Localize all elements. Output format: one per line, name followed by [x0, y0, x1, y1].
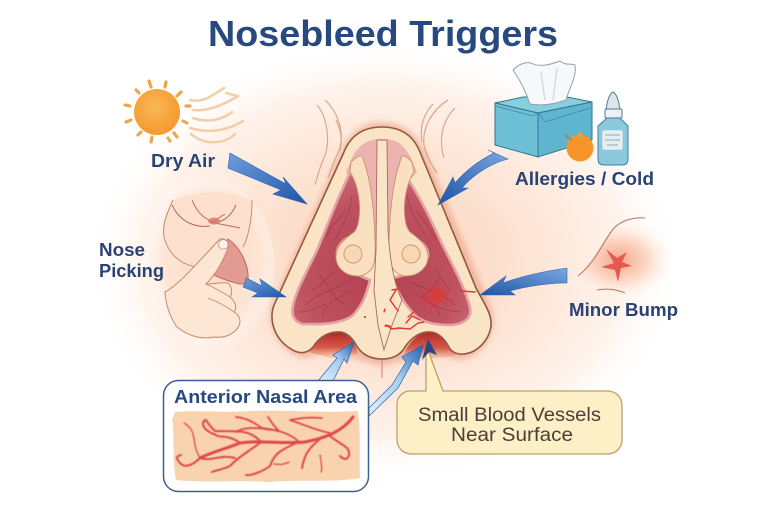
icon: minor bump	[570, 217, 678, 295]
outer nose shape	[272, 127, 491, 359]
label: Nose Picking	[99, 240, 164, 281]
panel: anterior nasal area	[164, 380, 368, 492]
icon: tissue box and nasal spray	[495, 61, 628, 165]
orange allergen	[565, 131, 594, 162]
label: Allergies / Cold: Allergies / Cold	[515, 169, 654, 189]
bruise star	[601, 249, 632, 282]
label: Dry Air: Dry Air	[151, 151, 215, 171]
septum	[374, 140, 402, 350]
nose shadow	[271, 122, 493, 366]
title: Nosebleed Triggers	[208, 13, 558, 54]
box front	[495, 103, 538, 157]
callout: small blood vessels: Near Surface	[451, 425, 573, 446]
arrow: dry air	[228, 153, 307, 204]
box side	[538, 102, 592, 157]
bleeding vessels	[384, 282, 475, 329]
face crease lines	[315, 100, 455, 378]
arrow: anterior to left nostril	[318, 342, 354, 381]
pinched nose	[164, 192, 252, 267]
air waves	[190, 88, 243, 142]
mucosa veins	[298, 195, 462, 318]
callout: small blood vessels: Small Blood Vessels	[418, 405, 601, 426]
callout: small blood vessels	[397, 339, 622, 454]
arrow: anterior to right nostril	[369, 345, 423, 416]
nose illustration	[271, 100, 493, 378]
arrow: allergies	[438, 150, 508, 205]
background glow	[85, 40, 685, 484]
arrow: nose picking	[243, 278, 286, 297]
label: Nose Picking: Picking	[99, 261, 164, 281]
panel heading: Anterior Nasal Area	[174, 387, 358, 407]
inner bridge	[346, 139, 417, 240]
turbinate left	[336, 156, 375, 276]
icon: sun and dry air	[125, 81, 243, 142]
label: Nose Picking: Nose	[99, 240, 145, 260]
tissue	[513, 61, 575, 105]
nostril openings	[309, 332, 358, 358]
label: Minor Bump: Minor Bump	[569, 300, 678, 320]
turbinate right	[389, 156, 428, 276]
spray bottle	[598, 92, 628, 165]
icon: nose picking hand	[135, 176, 275, 360]
tissue strip	[172, 411, 360, 482]
left passage	[292, 173, 370, 324]
finger and fist	[165, 239, 240, 338]
vessels	[177, 417, 353, 475]
nostril	[213, 239, 248, 284]
arrow: minor bump	[480, 268, 567, 295]
box top	[495, 97, 592, 113]
sun disc	[134, 89, 180, 135]
right passage	[393, 173, 470, 325]
